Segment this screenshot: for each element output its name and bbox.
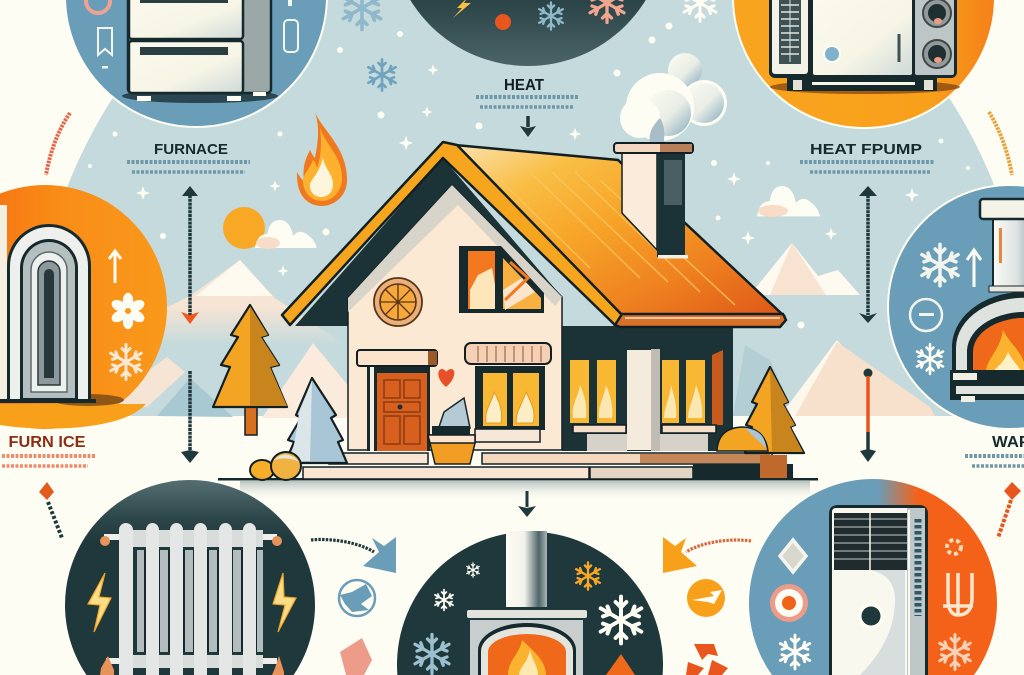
middle window and awning (465, 343, 551, 442)
wall (348, 185, 562, 450)
arrow: diamond bottom right (998, 482, 1021, 538)
label: furnace (127, 141, 250, 172)
roof right plane (455, 145, 783, 315)
panel: portable heater circle bottom right (749, 479, 997, 675)
top window (459, 246, 544, 313)
arrow: heat pump down (860, 368, 876, 462)
icon: blue ring badge (339, 580, 375, 616)
panel: radiator circle left (0, 185, 167, 429)
ground shadow under house (240, 481, 810, 501)
heart and plant pot (428, 369, 475, 464)
label: heat pump (800, 141, 935, 172)
icon: orange ring badge (687, 579, 725, 617)
icon: cloud right (757, 186, 820, 217)
icon: sun with cloud (223, 207, 317, 249)
panel: furnace circle top left (65, 0, 327, 127)
label: heat: HEAT (504, 77, 544, 94)
arrow: furnace double (181, 186, 199, 324)
label: heat pump: HEAT FPUMP (810, 141, 922, 158)
steps (303, 453, 793, 480)
house (218, 142, 818, 480)
arrow: diamond bottom left (39, 482, 62, 538)
icon: flame (297, 112, 347, 206)
label: furnace: FURNACE (154, 141, 228, 158)
icon: pink leaf (340, 638, 372, 675)
mountains: left (100, 260, 360, 418)
eave right (615, 314, 786, 327)
arrow: blue curved (311, 537, 396, 573)
label: heat (476, 77, 578, 107)
rock right (717, 427, 768, 451)
panel: stove circle bottom centre (397, 531, 663, 675)
panel: electric radiator circle bottom left (65, 480, 315, 675)
dark gable and soffit (295, 158, 733, 450)
background: pale blue sky arc (33, 0, 1024, 416)
arrow: heat label down (520, 116, 536, 137)
tree: orange left (213, 305, 287, 435)
tree: orange right (745, 367, 804, 453)
label: furn ice: FURN ICE (8, 434, 86, 451)
gable strip left (282, 142, 622, 325)
icon: snowflake near top (368, 59, 396, 91)
arrow: house to bottom (518, 491, 536, 517)
rocks left (250, 452, 301, 480)
icon: recycling (686, 644, 728, 675)
door and canopy (357, 350, 437, 451)
arrow: furnace down (181, 371, 199, 463)
icon: flake top right of centre (684, 0, 716, 21)
sky decorations: stars and dots (88, 22, 970, 328)
panel: heat pump circle top right (733, 0, 995, 128)
ground line (218, 478, 818, 480)
tree: blue (285, 378, 347, 463)
label: furn ice (2, 434, 96, 466)
icon: flake top left of centre (343, 0, 381, 29)
label: wap (965, 434, 1024, 466)
arrow: dashed top left (46, 113, 70, 175)
arrow: heat pump double (859, 186, 877, 323)
panel: top centre dark circle (390, 0, 666, 66)
round window (374, 278, 422, 326)
arrow: orange curved (663, 537, 751, 573)
arrow: dashed top right (989, 112, 1012, 175)
mountains: right (733, 243, 935, 416)
panel: stove circle right (888, 185, 1024, 429)
smoke from chimney (620, 53, 727, 143)
right windows (570, 349, 723, 451)
chimney (614, 143, 693, 258)
